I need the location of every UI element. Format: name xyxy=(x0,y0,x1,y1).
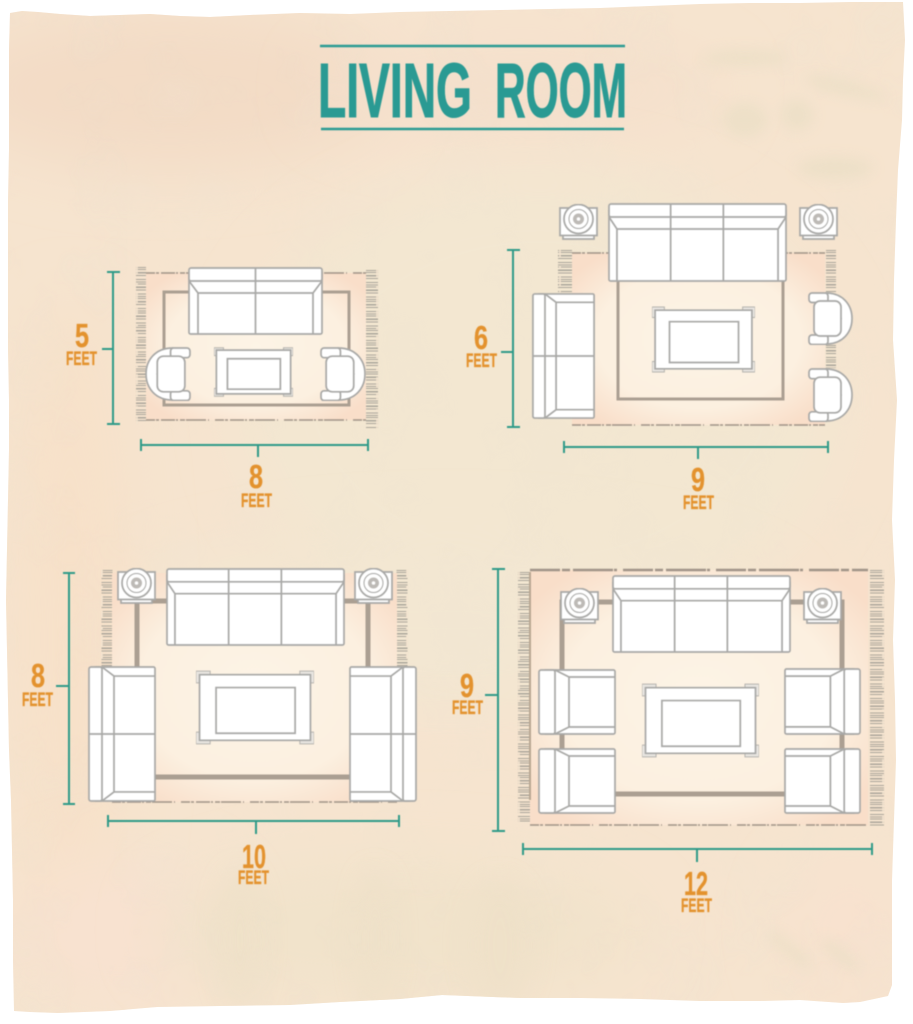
width dimension: 8 xyxy=(249,458,263,495)
width dimension: FEET xyxy=(683,492,714,514)
armchair top left xyxy=(539,670,615,734)
panel: 8 by 10 feet rug xyxy=(22,568,416,889)
width dimension: FEET xyxy=(681,895,712,917)
rug xyxy=(102,570,407,802)
sofa xyxy=(609,204,786,281)
height dimension: 5 xyxy=(75,317,89,354)
coffee table xyxy=(214,348,293,396)
height dimension: 8 xyxy=(31,657,45,694)
height dimension: FEET xyxy=(466,350,497,372)
lamp table left xyxy=(118,568,155,603)
title: ROOM xyxy=(495,48,627,134)
lamp table left xyxy=(561,588,598,623)
loveseat left xyxy=(89,667,155,801)
height dimension: FEET xyxy=(22,689,53,711)
lamp table right xyxy=(355,568,392,603)
decorative paper stains xyxy=(732,108,853,172)
coffee table xyxy=(642,684,759,757)
coffee table xyxy=(652,307,755,372)
sofa xyxy=(613,576,790,652)
title: LIVING xyxy=(318,48,472,134)
lamp table right xyxy=(800,204,837,239)
armchair right xyxy=(321,348,365,400)
panel: 5 by 8 feet rug xyxy=(66,267,377,512)
width dimension xyxy=(108,815,399,889)
height dimension: 9 xyxy=(460,667,474,704)
width dimension: 10 xyxy=(242,838,266,875)
height dimension xyxy=(22,573,75,804)
height dimension xyxy=(452,569,505,831)
rug xyxy=(519,570,883,826)
height dimension xyxy=(466,250,520,427)
sofa xyxy=(167,569,344,645)
width dimension: 12 xyxy=(684,865,708,902)
width dimension xyxy=(564,441,828,514)
armchair top right xyxy=(785,669,860,734)
sofa xyxy=(189,268,322,334)
panel: 9 by 12 feet rug xyxy=(452,569,883,917)
armchair left xyxy=(146,348,190,400)
width dimension: FEET xyxy=(238,867,269,889)
loveseat right xyxy=(350,667,416,801)
height dimension: 6 xyxy=(474,319,488,356)
armchair bottom left xyxy=(539,749,615,813)
rug xyxy=(137,267,377,428)
width dimension xyxy=(523,843,872,917)
armchair bottom right xyxy=(785,749,860,813)
lamp table left xyxy=(560,204,597,239)
lamp table right xyxy=(804,588,841,623)
width dimension: 9 xyxy=(691,461,705,498)
width dimension: FEET xyxy=(241,490,272,512)
height dimension xyxy=(66,272,120,424)
armchair bottom xyxy=(809,369,852,421)
armchair top xyxy=(809,293,852,344)
height dimension: FEET xyxy=(452,697,483,719)
height dimension: FEET xyxy=(66,348,97,370)
panel: 6 by 9 feet rug xyxy=(466,204,852,514)
coffee table xyxy=(196,671,314,744)
width dimension xyxy=(141,439,368,512)
loveseat xyxy=(533,294,594,418)
rug xyxy=(560,250,831,425)
